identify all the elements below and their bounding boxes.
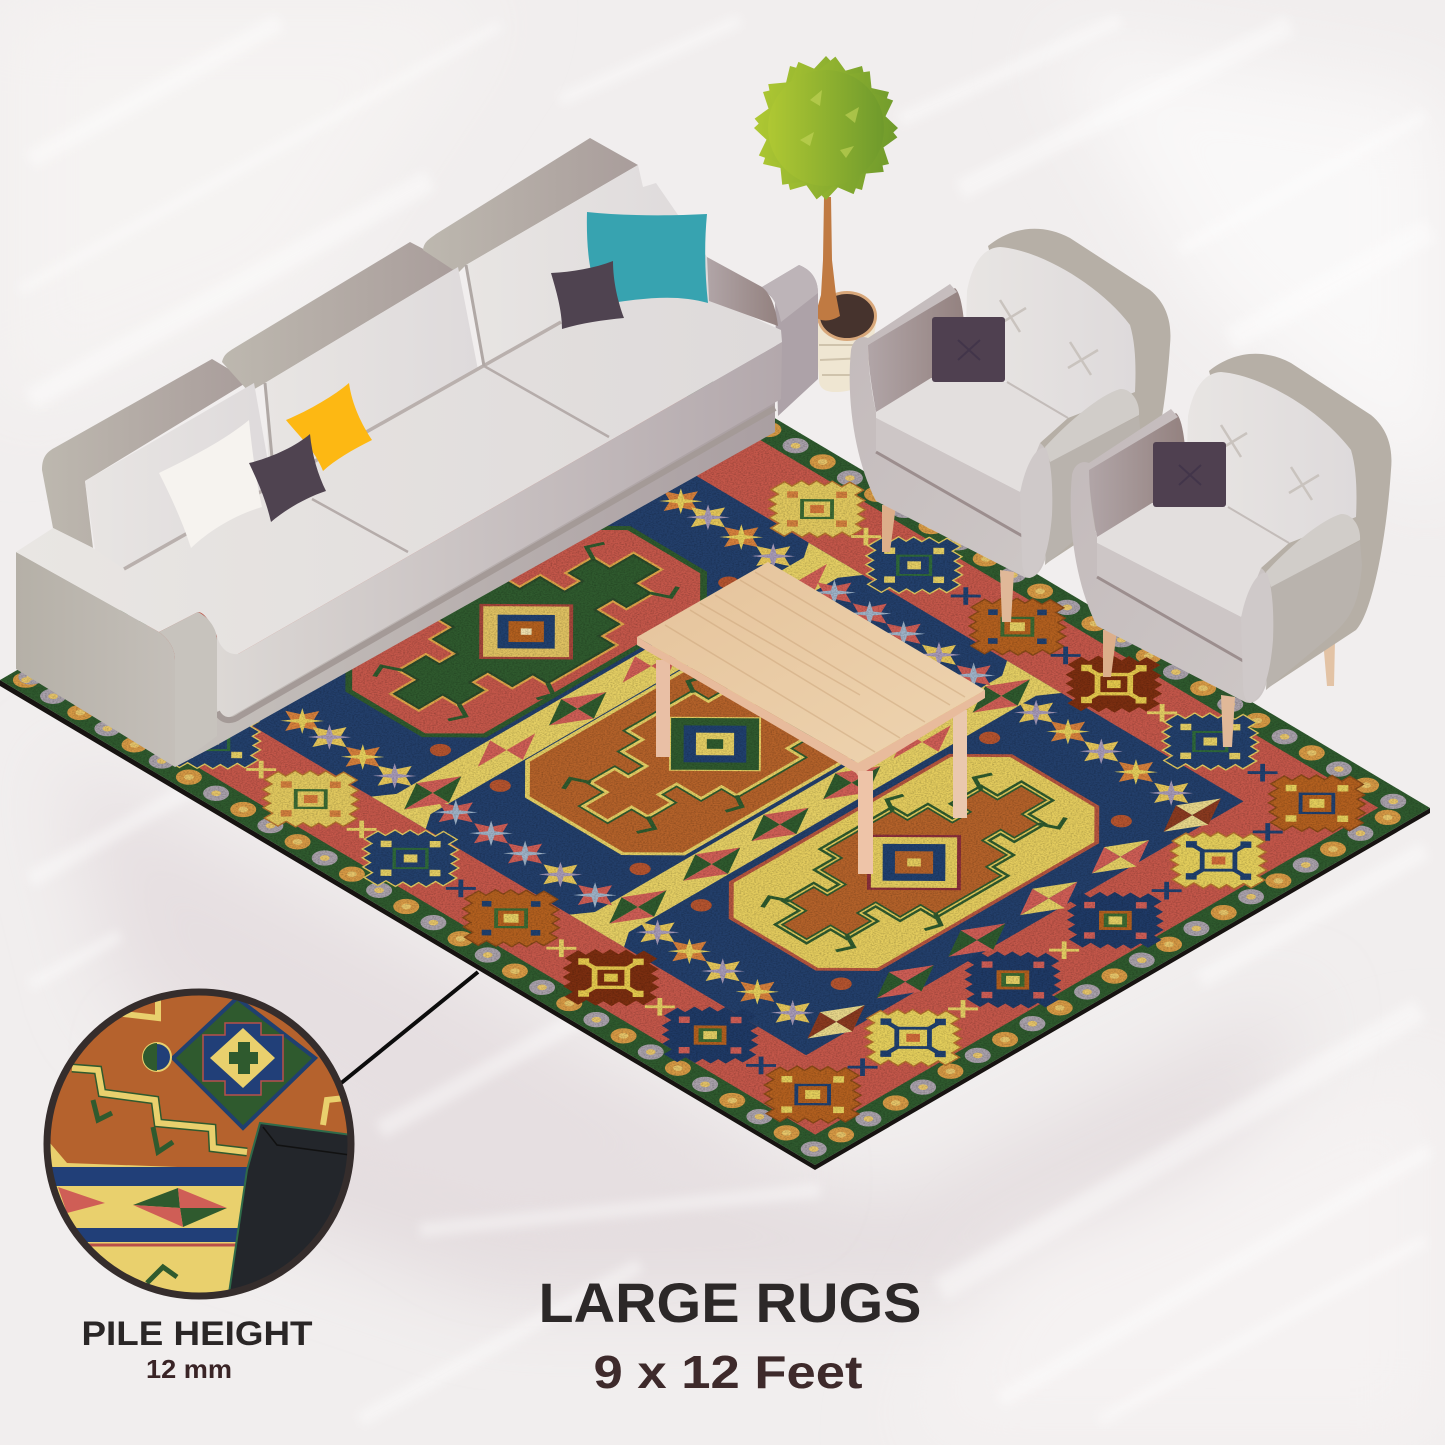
sofa inner arm (707, 257, 778, 326)
plant (745, 47, 907, 392)
inset big diamond (173, 998, 315, 1128)
sofa left arm front (159, 612, 217, 767)
rug beads (26, 338, 1404, 1150)
table front leg (858, 771, 873, 874)
rug field dots (425, 574, 1140, 995)
table legs (656, 660, 670, 757)
connector line (340, 972, 478, 1084)
rug medallion: red (318, 510, 734, 753)
sofa base (175, 400, 775, 767)
pillow: teal (587, 212, 708, 303)
inset small lobe (143, 1043, 171, 1071)
rug field stars (268, 481, 1205, 1033)
title: large rugs: LARGE RUGS (538, 1271, 922, 1334)
inset hooks (93, 1100, 173, 1152)
heading: pile height: PILE HEIGHT (82, 1315, 313, 1353)
sofa back rail middle (222, 242, 458, 392)
label: pile height value: 12 mm (146, 1354, 232, 1384)
sofa back rail left (42, 359, 249, 548)
inset ring (47, 992, 351, 1296)
sofa seat top (16, 271, 782, 654)
armchair: back (850, 229, 1170, 622)
table top (637, 562, 985, 763)
plant pot (815, 318, 877, 392)
sofa seat front (217, 342, 782, 718)
rug: black backing edge (0, 680, 1430, 1170)
rug green border (0, 323, 1430, 1165)
sofa back cushions (85, 383, 273, 575)
inset circle: rug pile detail (40, 985, 360, 1310)
rug border motifs (133, 400, 1396, 1143)
sofa (16, 138, 818, 767)
sofa seat lines (124, 322, 561, 569)
rug medallion: orange (497, 616, 933, 872)
pillow: chair two (1153, 442, 1226, 507)
rug border crosses (246, 468, 1331, 1106)
rug pile texture (1, 418, 1428, 1164)
sofa back rail right (423, 138, 638, 273)
pillow: chair one (932, 317, 1005, 382)
plant trunk (815, 197, 840, 320)
rug: large patterned carpet (0, 323, 1430, 1165)
plant crown (754, 56, 898, 200)
table top apron (637, 637, 985, 776)
coffee table (637, 562, 985, 874)
pillow: yellow (286, 383, 372, 471)
sofa right arm rear (762, 265, 818, 416)
sofa left arm outer (16, 552, 175, 767)
rug medallion: yellow (701, 737, 1127, 987)
pillow: white (159, 420, 262, 548)
inset turned-back corner (228, 1122, 348, 1290)
rug red band (52, 353, 1378, 1135)
rug bar diamonds (388, 552, 1242, 1054)
pillow: dark right (551, 261, 624, 329)
inset band diamonds (133, 1188, 180, 1208)
inset zigzag (72, 1068, 247, 1152)
inset orange field (50, 996, 348, 1167)
inset stripes (50, 1144, 244, 1292)
rug yellow bars (371, 543, 1061, 947)
armchair: front (1071, 354, 1391, 747)
rug navy field (187, 433, 1243, 1055)
pillow: dark left (249, 434, 326, 522)
subtitle: size: 9 x 12 Feet (594, 1346, 862, 1398)
